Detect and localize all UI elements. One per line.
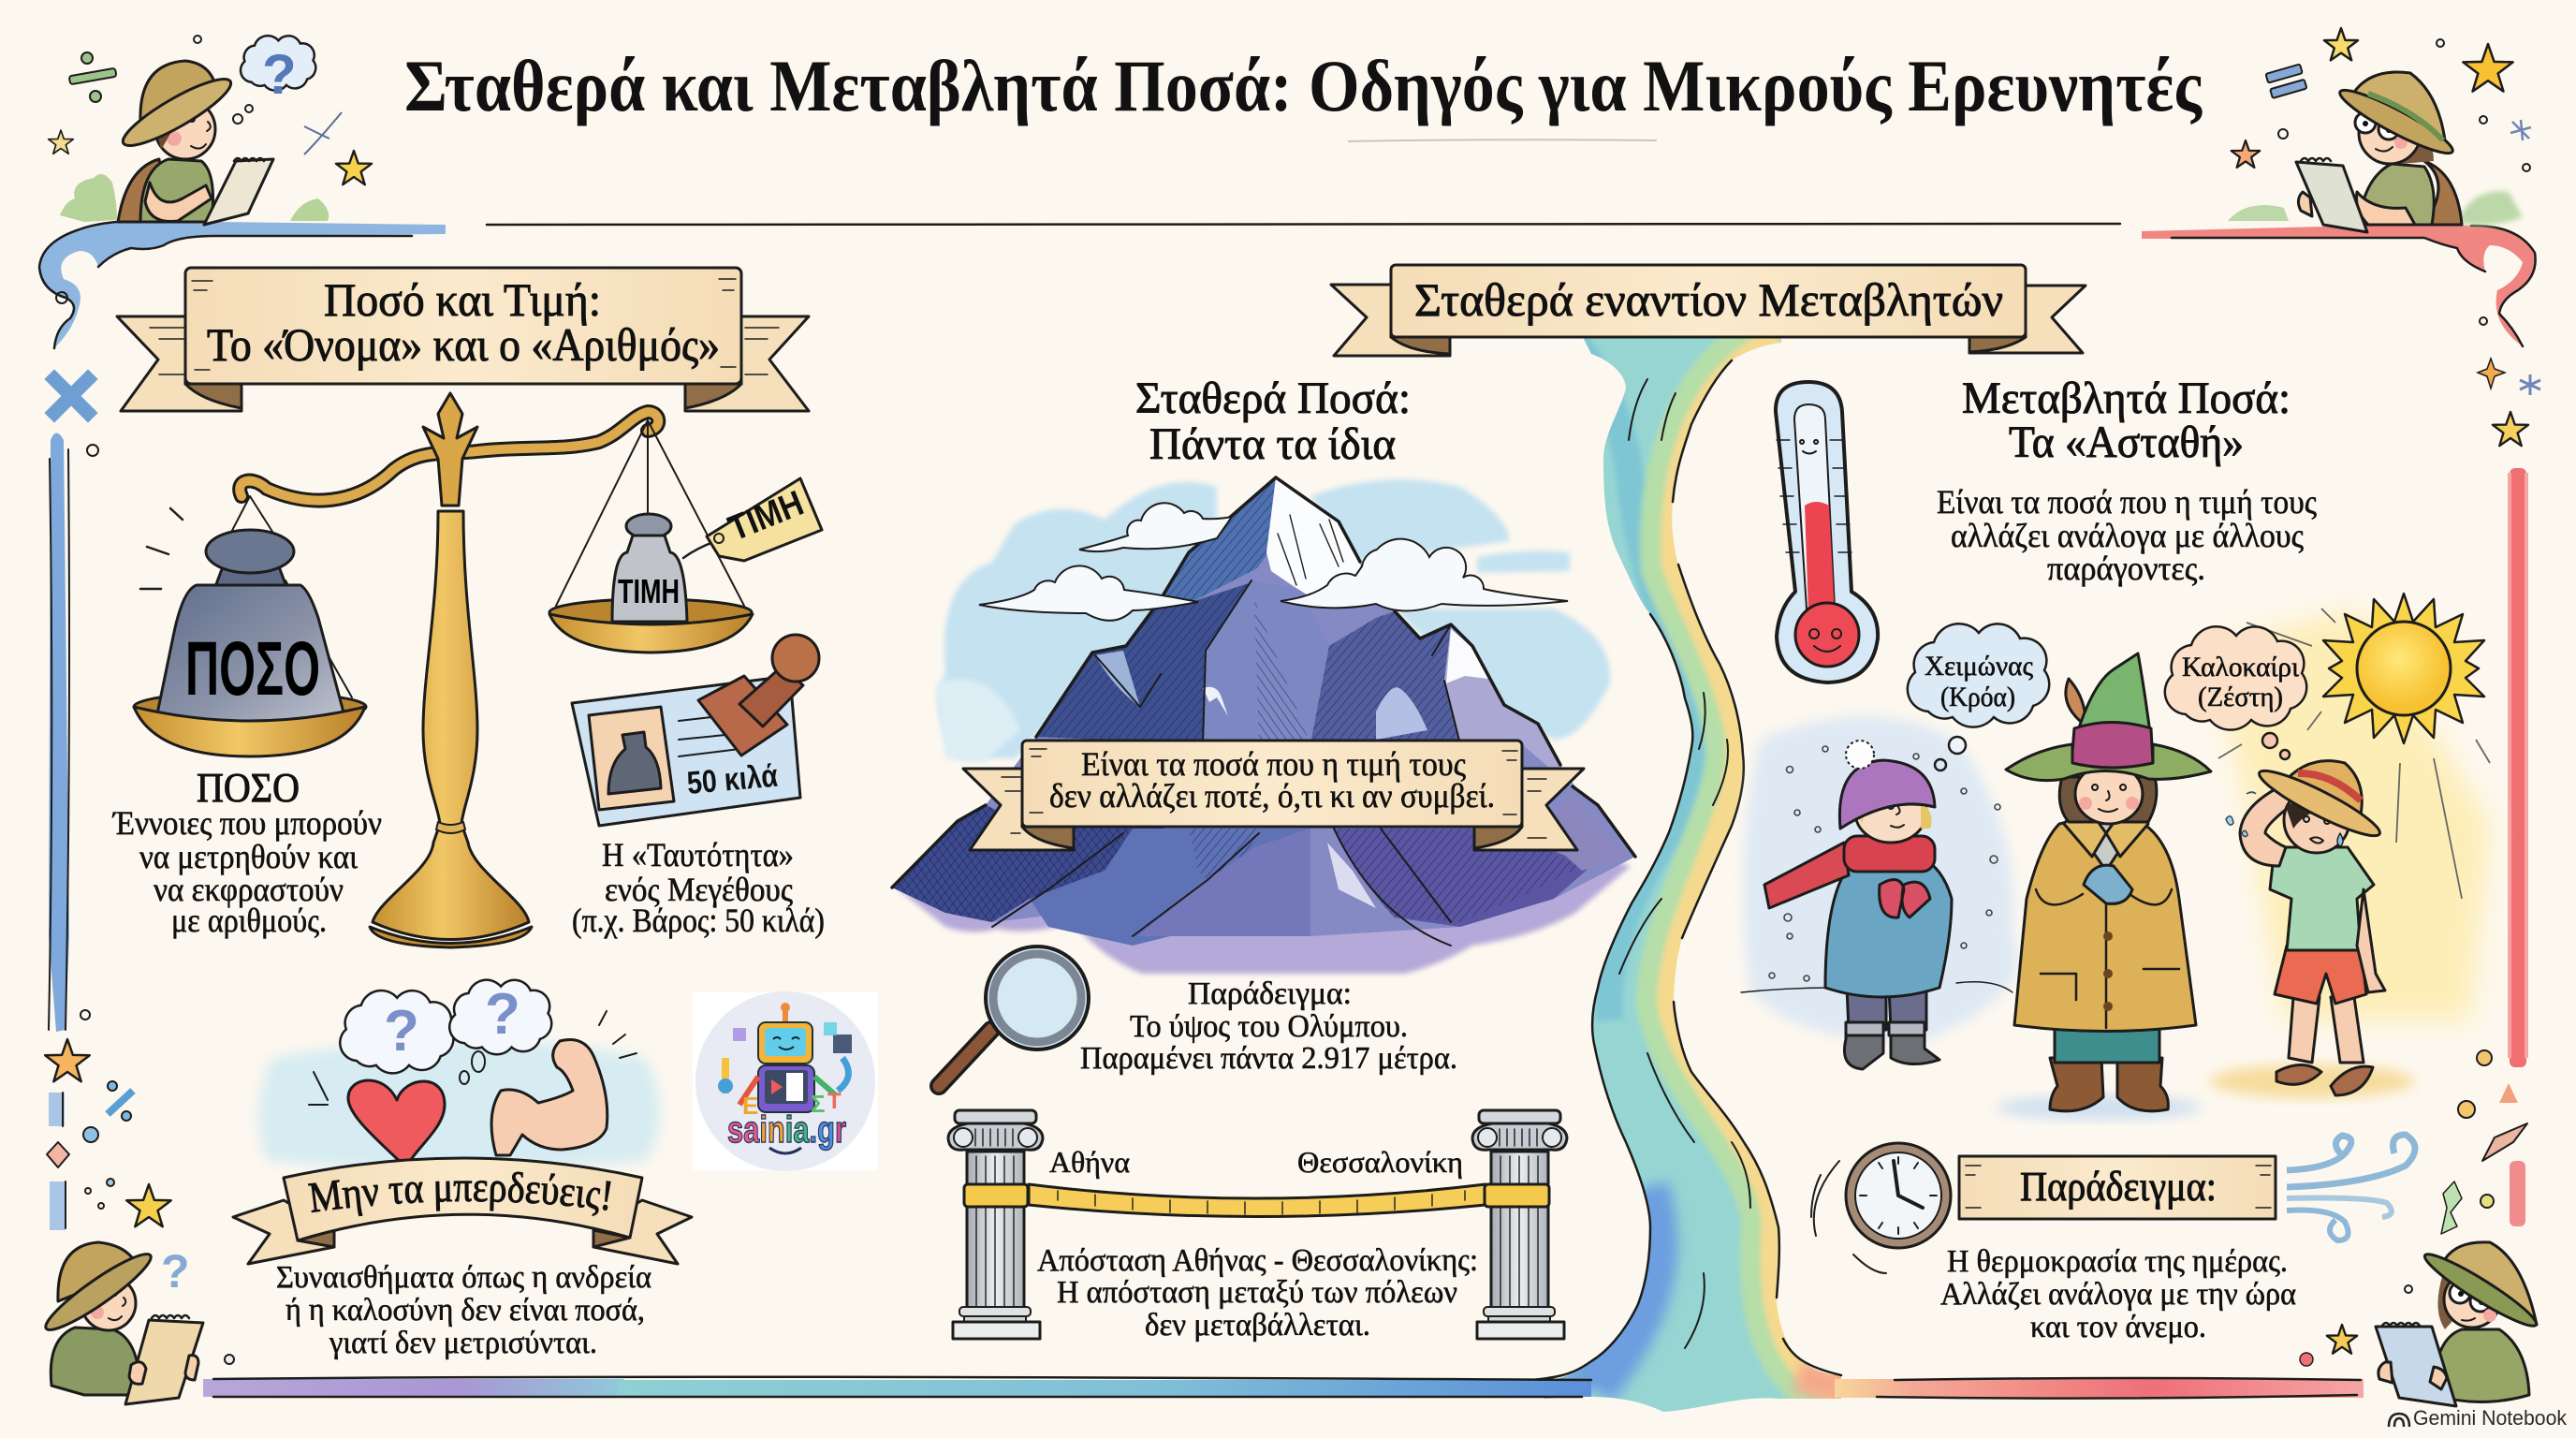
id card with stamp bbox=[572, 635, 819, 826]
thought cloud: winter bbox=[1908, 624, 2049, 770]
text: temperature example bbox=[1940, 1244, 2296, 1344]
right light face bbox=[1444, 627, 1582, 796]
price tag: ΤΙΜΗ bbox=[724, 484, 809, 549]
icon: thermometer bbox=[1776, 382, 1878, 682]
text: feelings are not quantities: ή η καλοσύνη δεν είναι ποσά, bbox=[285, 1293, 645, 1328]
section banner: constants vs variables: Σταθερά εναντίον Μεταβλητών bbox=[1414, 273, 2003, 326]
text: distance Athens-Thessaloniki: Απόσταση Αθήνας - Θεσσαλονίκης: bbox=[1037, 1243, 1478, 1278]
banner: constant quantity definition: Είναι τα ποσά που η τιμή τους bbox=[1081, 745, 1466, 783]
icon: divide sign bbox=[69, 52, 116, 102]
hair and face bbox=[2059, 777, 2157, 822]
banner: quantity and value heading: Το «Όνομα» και ο «Αριθμός» bbox=[207, 318, 720, 371]
rainbow river divider bbox=[1534, 339, 1842, 1412]
banner: example: Παράδειγμα: bbox=[2020, 1164, 2217, 1210]
legs bbox=[2289, 997, 2364, 1063]
text: variable definition: παράγοντες. bbox=[2047, 550, 2205, 587]
icon: magnifying glass bbox=[939, 946, 1089, 1086]
price tag bbox=[683, 478, 822, 561]
text: quantity description: να μετρηθούν και bbox=[139, 838, 358, 875]
banner: example bbox=[1959, 1156, 2276, 1219]
logo: sainia.gr robot: Τ bbox=[827, 1089, 842, 1114]
snow cap bbox=[1266, 477, 1367, 609]
text: quantity description: να εκφραστούν bbox=[154, 871, 344, 908]
character: top-left explorer: ? bbox=[262, 43, 297, 106]
decorative stars right bbox=[2478, 317, 2540, 446]
frame: top-left blue corner ornament bbox=[39, 221, 446, 348]
lower center bbox=[1030, 829, 1310, 946]
navy left face bbox=[1036, 582, 1251, 744]
text: Olympus example bbox=[1080, 976, 1457, 1076]
purple base wash bbox=[899, 824, 1631, 974]
decorative stars and symbols left bbox=[45, 1010, 234, 1364]
text: identity of a magnitude: (π.χ. Βάρος: 50 κιλά) bbox=[572, 902, 825, 939]
scarf bbox=[1764, 843, 1849, 908]
icon: clock bbox=[1811, 1143, 1951, 1273]
top frame line bbox=[487, 223, 2120, 225]
text: Olympus example: Παραμένει πάντα 2.917 μέτρα. bbox=[1080, 1041, 1457, 1076]
thought cloud: winter: Χειμώνας bbox=[1925, 651, 2033, 682]
character: bottom-left explorer bbox=[39, 1242, 203, 1404]
heading: variable quantities: Μεταβλητά Ποσά: bbox=[1962, 374, 2291, 423]
icon: multiply sign bbox=[54, 379, 88, 413]
illustration: heart and muscle confusion bbox=[258, 980, 660, 1170]
text: distance Athens-Thessaloniki bbox=[1037, 1243, 1478, 1343]
right pan with small weight: ΤΙΜΗ bbox=[618, 572, 680, 610]
character: bottom-left explorer: ? bbox=[161, 1245, 190, 1298]
ridge blue bbox=[1161, 477, 1276, 602]
illustration: heart and muscle confusion: ? bbox=[384, 999, 419, 1064]
lower left dark bbox=[892, 805, 1170, 922]
text: identity of a magnitude: ενός Μεγέθους bbox=[605, 871, 793, 908]
logo: sainia.gr robot: sainia.gr bbox=[727, 1109, 846, 1151]
banner: do not confuse them: Μην τα μπερδεύεις! bbox=[307, 1172, 611, 1217]
text: quantity description: ΠΟΣΟ bbox=[197, 765, 300, 811]
text: feelings are not quantities: γιατί δεν μετρισύνται. bbox=[329, 1326, 597, 1360]
sky wash bbox=[938, 479, 1610, 758]
scale beam bbox=[240, 412, 658, 501]
illustration: columns with measuring tape: Αθήνα bbox=[1049, 1145, 1130, 1179]
thought cloud: summer bbox=[2165, 626, 2306, 759]
text: variable definition: Είναι τα ποσά που η τιμή τους bbox=[1937, 483, 2317, 521]
heading: constant quantities bbox=[1135, 374, 1411, 469]
frame: right red stripes bbox=[2510, 468, 2526, 1226]
left pan with big weight bbox=[134, 496, 366, 756]
text: distance Athens-Thessaloniki: Η απόσταση μεταξύ των πόλεων bbox=[1057, 1275, 1457, 1310]
title: Σταθερά και Μεταβλητά Ποσά: Οδηγός για Μικρούς Ερευνητές bbox=[404, 45, 2203, 126]
section banner: constants vs variables bbox=[1331, 265, 2086, 356]
illustration: middle child with coat and hat bbox=[1996, 653, 2211, 1120]
decorative stars top-left bbox=[49, 112, 372, 184]
clouds bbox=[1079, 503, 1232, 551]
thought cloud: summer: (Ζέστη) bbox=[2198, 682, 2283, 712]
frame: top-right red corner ornament bbox=[2142, 224, 2536, 346]
heading: variable quantities bbox=[1962, 374, 2291, 467]
heart bbox=[348, 1080, 445, 1167]
thought cloud: winter: (Κρόα) bbox=[1940, 682, 2015, 712]
face bbox=[1855, 783, 1926, 843]
outline bbox=[892, 477, 1635, 888]
hat bbox=[1839, 760, 1935, 829]
scale stand bbox=[373, 511, 529, 940]
stamp bbox=[698, 635, 819, 756]
logo: sainia.gr robot bbox=[693, 991, 878, 1171]
illustration: columns with measuring tape bbox=[948, 1110, 1567, 1339]
arm bbox=[2240, 785, 2298, 866]
coat bbox=[2014, 813, 2196, 1032]
text: quantity description bbox=[111, 765, 382, 939]
sun with rays bbox=[2209, 594, 2490, 1020]
text: temperature example: Η θερμοκρασία της ημέρας. bbox=[1947, 1244, 2288, 1279]
banner: constant quantity definition: δεν αλλάζει ποτέ, ό,τι κι αν συμβεί. bbox=[1049, 777, 1495, 814]
right pan with small weight bbox=[549, 420, 753, 653]
mittens bbox=[1880, 880, 1930, 917]
banner: constant quantity definition bbox=[963, 741, 1584, 850]
boots and legs bbox=[1847, 988, 1926, 1030]
decorative symbols lower right bbox=[2300, 1050, 2527, 1366]
banner: quantity and value heading bbox=[117, 268, 809, 411]
illustration: mountain with clouds bbox=[892, 477, 1635, 974]
text: identity of a magnitude: Η «Ταυτότητα» bbox=[602, 836, 794, 873]
bottom band: red bbox=[1835, 1378, 2364, 1399]
character: bottom-right explorer bbox=[2376, 1242, 2541, 1406]
icon: wind swirls bbox=[2287, 1135, 2415, 1240]
text: variable definition bbox=[1937, 483, 2317, 587]
shirt bbox=[2270, 847, 2374, 950]
bottom band: purple to blue bbox=[203, 1377, 1591, 1398]
face bbox=[2284, 787, 2349, 853]
watermark: Gemini Notebook: Gemini Notebook bbox=[2413, 1406, 2568, 1430]
illustration: hot child in summer bbox=[2209, 761, 2415, 1098]
frame: left blue stripes bbox=[49, 433, 69, 1230]
character: top-right explorer bbox=[2228, 72, 2523, 232]
text: temperature example: Αλλάζει ανάλογα με την ώρα bbox=[1940, 1277, 2296, 1312]
heading: constant quantities: Σταθερά Ποσά: bbox=[1135, 374, 1411, 423]
text: Olympus example: Το ύψος του Ολύμπου. bbox=[1130, 1009, 1408, 1044]
text: quantity description: με αριθμούς. bbox=[171, 902, 327, 939]
muscle arm bbox=[491, 1039, 607, 1155]
id card with stamp: 50 κιλά bbox=[685, 758, 779, 801]
text: identity of a magnitude bbox=[572, 836, 825, 939]
illustration: cold child in winter bbox=[1741, 716, 2018, 1069]
center face bbox=[1203, 580, 1329, 744]
text: quantity description: Έννοιες που μπορούν bbox=[111, 804, 382, 842]
banner: do not confuse them bbox=[232, 1157, 693, 1266]
text: distance Athens-Thessaloniki: δεν μεταβάλλεται. bbox=[1145, 1308, 1370, 1343]
feather bbox=[2066, 679, 2086, 723]
balance scale bbox=[134, 393, 822, 947]
heading: variable quantities: Τα «Ασταθή» bbox=[2009, 418, 2244, 467]
illustration: columns with measuring tape: Θεσσαλονίκη bbox=[1297, 1145, 1463, 1179]
illustration: heart and muscle confusion: ? bbox=[485, 982, 520, 1047]
text: Olympus example: Παράδειγμα: bbox=[1188, 976, 1352, 1011]
mountain body bbox=[892, 477, 1635, 936]
character: top-left explorer bbox=[60, 36, 329, 225]
decorative symbols top-right bbox=[2232, 28, 2531, 171]
text: temperature example: και τον άνεμο. bbox=[2030, 1310, 2206, 1344]
thought cloud: summer: Καλοκαίρι bbox=[2182, 652, 2299, 682]
logo: sainia.gr robot: Ε bbox=[742, 1092, 758, 1120]
text: variable definition: αλλάζει ανάλογα με άλλους bbox=[1951, 517, 2304, 554]
logo: sainia.gr robot: Σ bbox=[811, 1090, 826, 1118]
lower right bbox=[1334, 829, 1591, 927]
heading: constant quantities: Πάντα τα ίδια bbox=[1149, 419, 1396, 469]
banner: quantity and value heading: Ποσό και Τιμή: bbox=[324, 273, 601, 326]
text: feelings are not quantities: Συναισθήματα όπως η ανδρεία bbox=[276, 1260, 651, 1295]
coat bbox=[1825, 857, 1952, 997]
hat bbox=[2075, 653, 2151, 740]
small circle bbox=[87, 445, 98, 456]
text: feelings are not quantities bbox=[276, 1260, 651, 1360]
hat bbox=[2282, 761, 2362, 814]
shorts bbox=[2275, 946, 2366, 1004]
right dark face bbox=[1310, 611, 1460, 744]
left pan with big weight: ΠΟΣΟ bbox=[185, 626, 320, 712]
